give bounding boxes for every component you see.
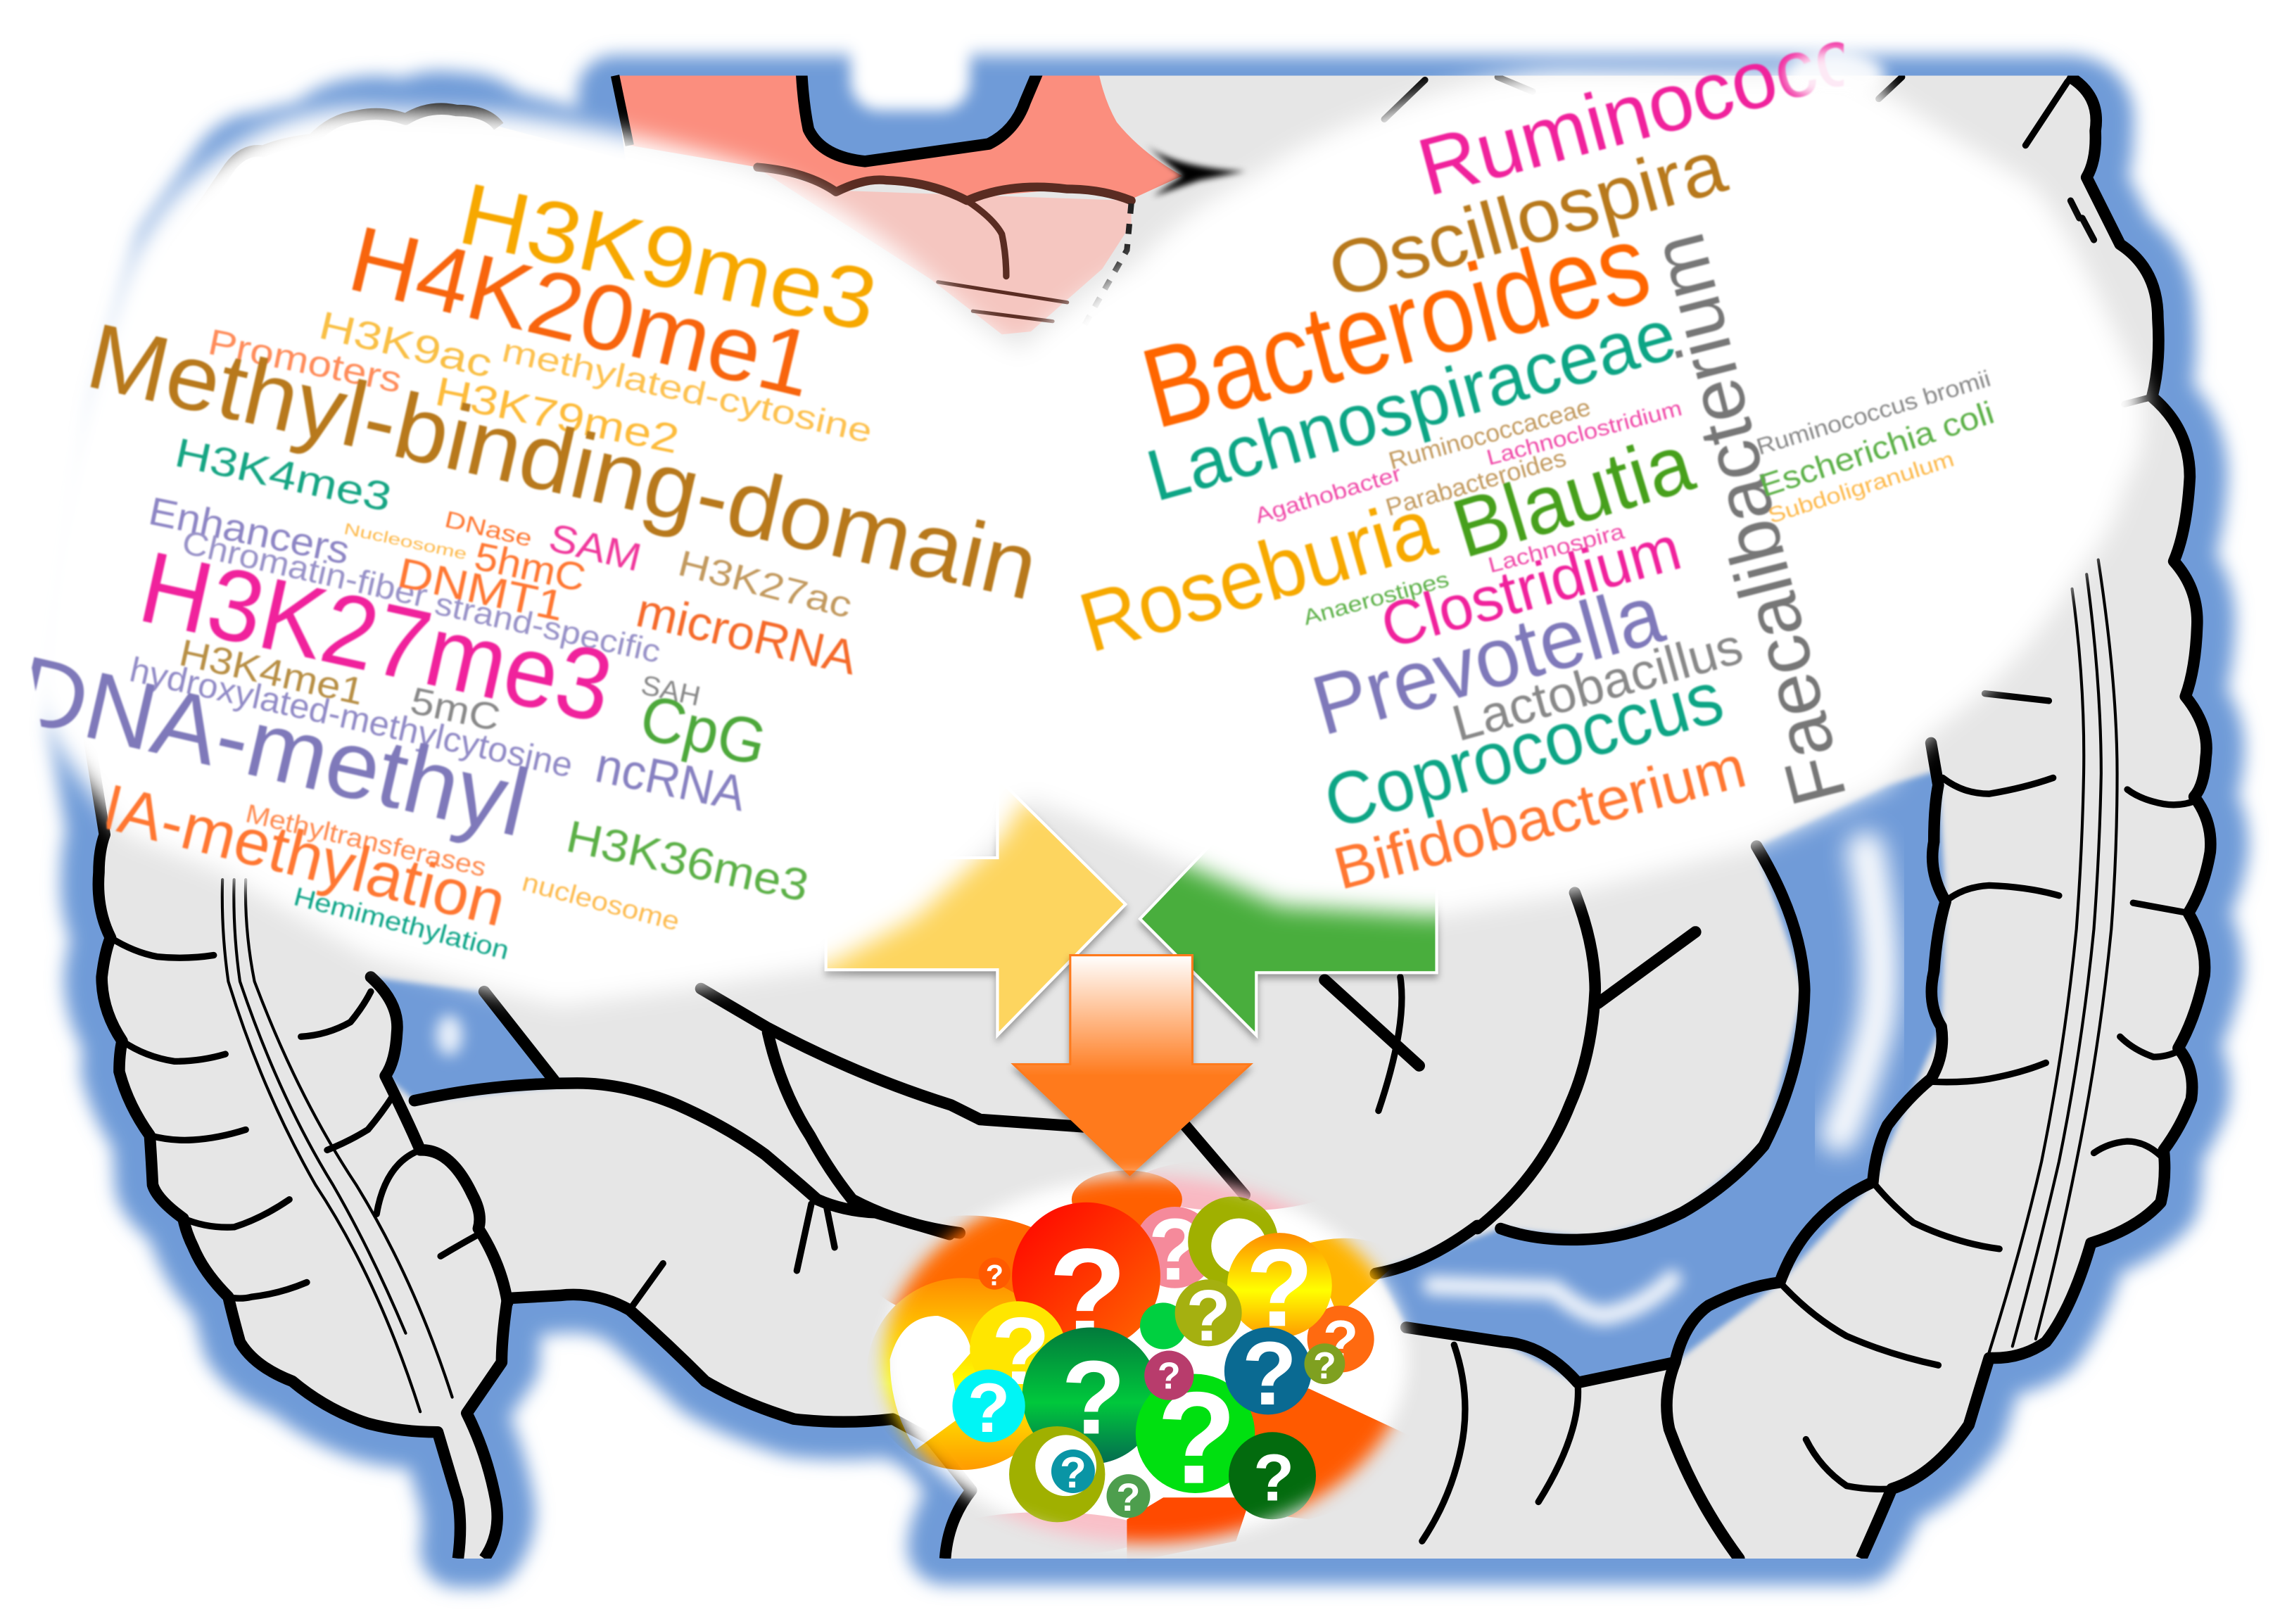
- bubble: [1140, 1302, 1186, 1349]
- blue gap: right side between colon and small intestine: [1377, 770, 1946, 1383]
- black spike right of stomach: [1143, 142, 1246, 196]
- word: H3K79me2: [431, 369, 683, 462]
- word: Lactobacillus: [1446, 618, 1749, 752]
- bubble: ?: [1116, 1476, 1141, 1519]
- word: Lachnoclostridium: [1484, 395, 1685, 470]
- white streak in right gap, vertical: [1839, 851, 1880, 1134]
- question mark bubble cluster: [858, 1148, 1440, 1585]
- word: Oscillospira: [1319, 123, 1735, 314]
- bubble: ?: [1158, 1355, 1181, 1397]
- word: microRNA: [632, 583, 862, 685]
- word: Prevotella: [1303, 567, 1673, 754]
- word: H4K20me1: [340, 206, 824, 417]
- big ring left: [867, 1278, 1058, 1470]
- bubble: [1175, 1274, 1242, 1356]
- yellow wedge right top: [1309, 1238, 1403, 1316]
- pink backdrop top: [1134, 1159, 1338, 1211]
- bubble: ?: [1157, 1366, 1236, 1511]
- pink backdrop bottom: [945, 1512, 1148, 1556]
- word: hydroxylated-methylcytosine: [126, 649, 576, 785]
- bubble: [1136, 1366, 1255, 1511]
- word: Parabacteroides: [1383, 444, 1569, 521]
- left feathered colon band: [222, 880, 452, 1412]
- stomach upper salmon body: [615, 75, 1182, 199]
- white streak in right gap, horizontal: [1432, 1279, 1672, 1316]
- word: H3K27ac: [674, 543, 856, 626]
- word: Bifidobacterium: [1327, 732, 1752, 902]
- bubble: [1051, 1449, 1095, 1497]
- word: H3K36me3: [562, 811, 813, 911]
- stomach opening white glow: [851, 0, 970, 110]
- stomach blue opening: [802, 64, 1041, 161]
- white cloud behind both word clouds: [29, 70, 2144, 1006]
- word: CpG: [633, 682, 773, 780]
- bubble: [952, 1369, 1025, 1447]
- bubble: ?: [1061, 1338, 1125, 1456]
- word: DNMT1: [393, 549, 569, 630]
- bubble: [1022, 1327, 1159, 1464]
- word: 5mC: [407, 680, 504, 740]
- word: Anaerostipes: [1300, 566, 1452, 630]
- word: 5hmC: [471, 534, 590, 600]
- word: Nucleosome: [343, 519, 469, 563]
- intestine inner outlines: [371, 743, 1946, 1559]
- bubble: [1304, 1343, 1345, 1387]
- word: SAH: [638, 669, 703, 712]
- word: Bacteroides: [1130, 199, 1661, 452]
- word: Hemimethylation: [291, 881, 512, 965]
- bubble: ?: [1148, 1201, 1201, 1298]
- bubble: ?: [1313, 1345, 1336, 1387]
- bubble: ?: [992, 1298, 1050, 1404]
- bubble: ?: [1060, 1449, 1087, 1497]
- word: Ruminococcaceae: [1386, 393, 1593, 475]
- word: DNase: [442, 507, 535, 552]
- word: ncRNA: [591, 737, 751, 822]
- bubble: [1106, 1474, 1150, 1519]
- word: H3K9me3: [451, 165, 885, 350]
- word: Escherichia coli: [1755, 394, 1999, 504]
- bubble: [1224, 1324, 1312, 1424]
- word: Chromatin-fiber: [179, 524, 431, 615]
- word: H3K4me3: [171, 430, 395, 521]
- bubble: ?: [1049, 1222, 1127, 1365]
- cluster base: [858, 1148, 1440, 1585]
- word: Clostridium: [1374, 513, 1688, 661]
- word: DNA-methylation: [21, 752, 513, 940]
- orange wedge top: [1072, 1170, 1182, 1229]
- word cloud: epigenetic marks: [7, 165, 1047, 965]
- word: Coprococcus: [1316, 656, 1731, 844]
- word: Blautia: [1443, 415, 1704, 575]
- word: H3K9ac: [315, 303, 496, 386]
- orange wedge right: [1250, 1388, 1418, 1519]
- bubble: ?: [1246, 1226, 1313, 1350]
- orange wedge left top: [865, 1215, 1069, 1320]
- word: strand-specific: [432, 585, 664, 670]
- word: H3K27me3: [130, 529, 622, 744]
- stomach left edge: [615, 75, 630, 146]
- orange downward arrow: [1013, 956, 1250, 1175]
- bubble: [1188, 1197, 1278, 1287]
- bubble: [1012, 1203, 1160, 1365]
- bubble: ?: [1253, 1440, 1294, 1515]
- stomach dashed right edge: [1083, 203, 1132, 327]
- bubble: ?: [968, 1369, 1010, 1447]
- bubble: [970, 1298, 1066, 1404]
- word: Faecalibacterium: [1635, 225, 1863, 813]
- word: Ruminococcus bromii: [1754, 366, 1994, 460]
- bubble: ?: [1242, 1324, 1297, 1424]
- white glow in left gap: [436, 1015, 462, 1055]
- word: methylated-cytosine: [498, 331, 875, 450]
- stomach folds: [758, 167, 1132, 322]
- word: DNA-methyl: [7, 635, 538, 856]
- bubble: ?: [1186, 1274, 1231, 1356]
- stomach lower pale pouch: [756, 167, 1132, 334]
- bubble: ?: [986, 1260, 1003, 1292]
- bubble: [1227, 1226, 1332, 1350]
- word cloud: gut microbes: [1070, 0, 1999, 902]
- orange wedge bottom: [1127, 1497, 1250, 1563]
- orange ring right: [1307, 1305, 1374, 1374]
- green arrow: [1140, 797, 1437, 1035]
- orange ring right: ?: [1323, 1308, 1358, 1374]
- word: Lachnospira: [1486, 519, 1628, 578]
- word: Roseburia: [1070, 480, 1445, 671]
- word: H3K4me1: [175, 631, 368, 713]
- right feathered colon band: [1989, 560, 2117, 1352]
- bubble: [1229, 1432, 1316, 1519]
- bubble: [1134, 1201, 1215, 1298]
- word: Lachnospiraceae: [1139, 293, 1684, 516]
- word: Subdoligranulum: [1765, 447, 1957, 528]
- blue gap: left side between colon and small intestine: [371, 977, 577, 1100]
- word: Methyltransferases: [243, 798, 489, 882]
- bubble: [1009, 1426, 1105, 1522]
- word: SAM: [545, 515, 645, 580]
- word: Methyl-binding-domain: [78, 304, 1047, 620]
- bubble: [1144, 1351, 1193, 1400]
- word: nucleosome: [519, 867, 683, 936]
- bubble: [979, 1257, 1011, 1292]
- yellow arrow: [826, 778, 1125, 1035]
- word: Agathobacter: [1252, 461, 1404, 528]
- word: Promoters: [205, 321, 405, 400]
- stomach: [611, 42, 1246, 335]
- white fade over the clipped end of Ruminococcus: [1785, 49, 1885, 102]
- word: Enhancers: [145, 489, 353, 573]
